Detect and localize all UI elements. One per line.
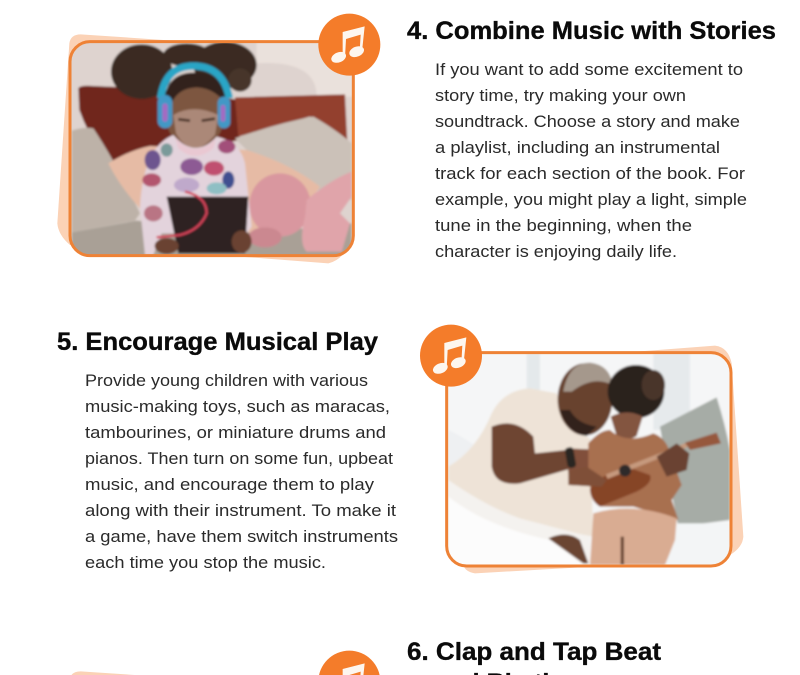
section 4: combine music with stories [407, 17, 776, 261]
photo border [447, 353, 731, 566]
hands [587, 468, 606, 487]
body text 5 [85, 371, 398, 572]
panel: photo of child with headphones [57, 14, 380, 263]
tablet [167, 197, 248, 253]
icon: music note badge [420, 325, 482, 387]
photo border [70, 42, 353, 256]
child hair [608, 365, 664, 418]
panel: third section photo (cropped at page edge) [69, 651, 380, 675]
ukulele [590, 467, 651, 507]
hands [155, 238, 179, 254]
body text 4: a playlist, including an instrumental [435, 138, 720, 157]
panel: photo of father and child with ukulele [420, 325, 743, 573]
photo: father and child [445, 352, 733, 568]
child dress [588, 430, 682, 520]
head [168, 85, 222, 145]
icon: music note badge [318, 651, 380, 675]
body text 5: music, and encourage them to play [85, 475, 375, 494]
body text 4: example, you might play a light, simple [435, 190, 747, 209]
body text 5: music-making toys, such as maracas, [85, 397, 390, 416]
child face [611, 412, 643, 439]
body text 5: pianos. Then turn on some fun, upbeat [85, 449, 393, 468]
body text 4: soundtrack. Choose a story and make [435, 112, 740, 131]
body text 4 [435, 60, 747, 261]
body text 4: tune in the beginning, when the [435, 216, 692, 235]
plush toy [249, 173, 311, 237]
body text 4: story time, try making your own [435, 86, 686, 105]
body text 4: track for each section of the book. For [435, 164, 745, 183]
photo backing shape [69, 671, 337, 675]
hair [111, 44, 172, 99]
shirt [140, 135, 252, 255]
body text 4: If you want to add some excitement to [435, 60, 743, 79]
photo backing shape [57, 34, 352, 263]
body text 5: Provide young children with various [85, 371, 368, 390]
body text 4: character is enjoying daily life. [435, 242, 677, 261]
man arm [492, 423, 572, 484]
headphones [161, 66, 229, 98]
section 6: clap and tap heading: 6. Clap and Tap Beat [407, 638, 662, 666]
body text 5: along with their instrument. To make it [85, 501, 396, 520]
child pants [590, 509, 677, 565]
body text 5: tambourines, or miniature drums and [85, 423, 386, 442]
photo: child using tablet [68, 40, 355, 258]
man shirt [448, 388, 593, 537]
body text 5: each time you stop the music. [85, 553, 326, 572]
body text 5: a game, have them switch instruments [85, 527, 398, 546]
heading 4: 4. Combine Music with Stories [407, 17, 776, 45]
man head [558, 363, 612, 435]
pillow [660, 397, 730, 527]
photo backing shape [453, 346, 743, 573]
heading 5: 5. Encourage Musical Play [57, 328, 378, 356]
section 5: encourage musical play [57, 328, 398, 572]
icon: music note badge [318, 14, 380, 76]
